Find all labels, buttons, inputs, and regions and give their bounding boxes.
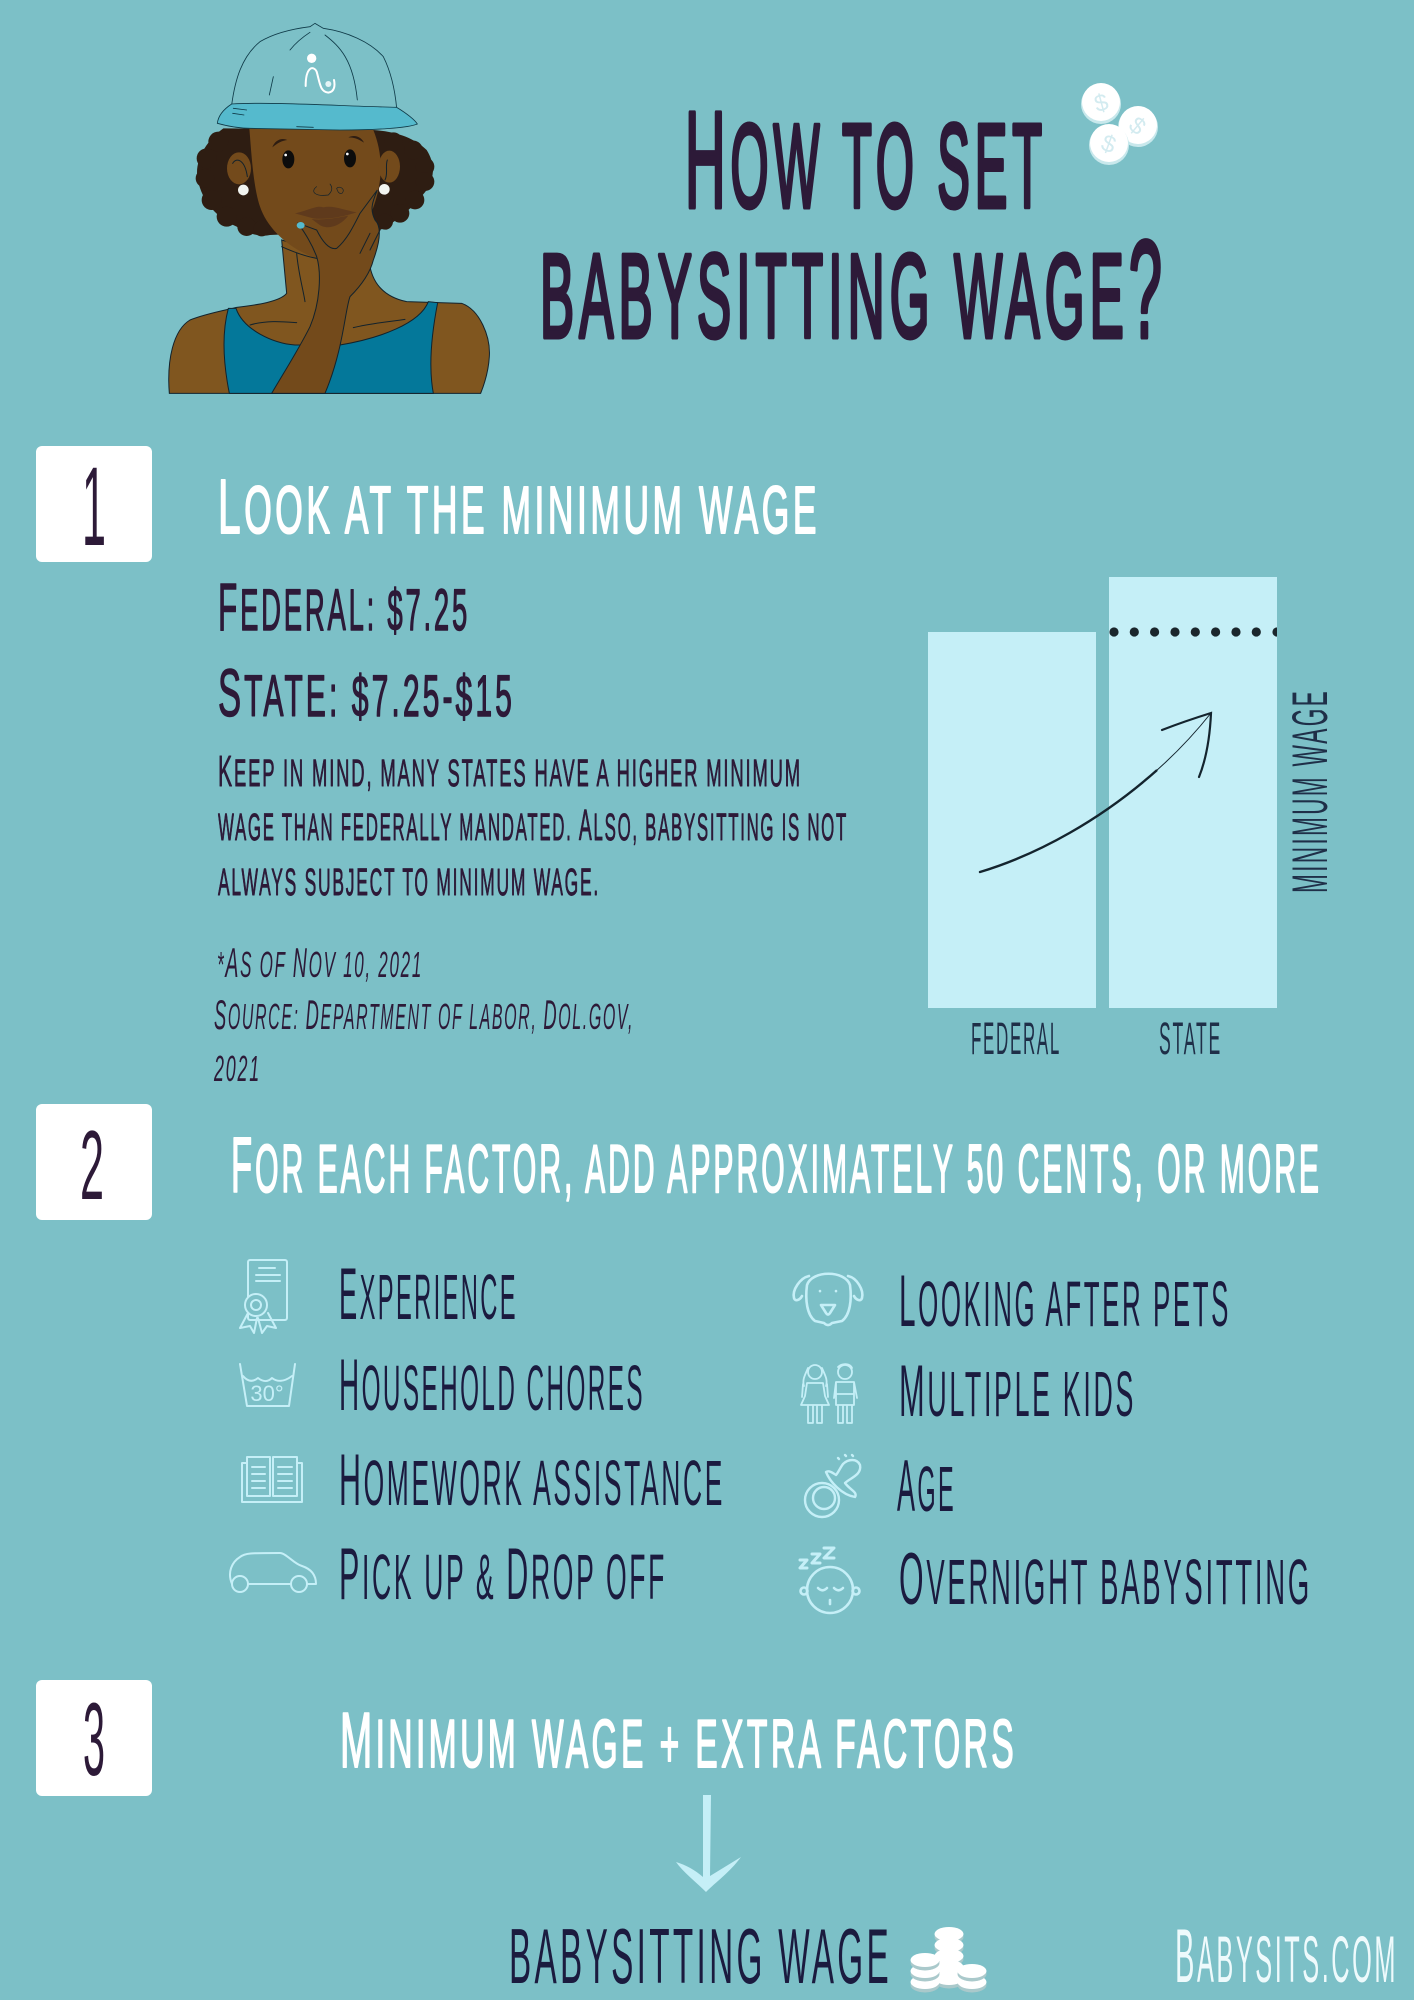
explanatory paragraph: ALWAYS SUBJECT TO MINIMUM WAGE.: [218, 862, 600, 904]
section 1: FEDERAL: $7.25: [218, 571, 470, 645]
arrow: rising wage: [980, 713, 1211, 872]
number badge 3: 3: [83, 1682, 105, 1798]
state wage: STATE: $7.25-$15: [218, 657, 515, 731]
section 3: BABYSITTING WAGE: [509, 1912, 892, 2000]
explanatory paragraph: KEEP IN MIND, MANY STATES HAVE A HIGHER MINIMUM: [218, 747, 802, 796]
explanatory paragraph: WAGE THAN FEDERALLY MANDATED. ALSO, BABYSITTING IS NOT: [218, 801, 848, 850]
factor: household chores: [240, 1343, 645, 1426]
factor: pick up and drop off: [230, 1532, 667, 1615]
factor: experience: [240, 1252, 518, 1335]
source note: *AS OF NOV 10, 2021: [217, 940, 423, 986]
icon: open book: [242, 1457, 302, 1502]
earrings: [238, 184, 390, 195]
bar chart: federal vs state minimum wage: [928, 577, 1338, 1064]
face: [249, 128, 381, 258]
bar chart: federal vs state minimum wage: STATE: [1159, 1013, 1222, 1064]
section 2: AGE: [897, 1444, 956, 1527]
section 2: MULTIPLE KIDS: [899, 1349, 1136, 1432]
cap seams: [233, 32, 357, 127]
number badge 2: 2: [80, 1110, 104, 1220]
icon: three dollar coins: [1081, 83, 1158, 165]
bar chart: federal vs state minimum wage: FEDERAL: [971, 1013, 1061, 1064]
federal bar: [928, 632, 1096, 1008]
icon: sleeping baby: [800, 1548, 860, 1613]
factor: multiple kids: [801, 1349, 1136, 1432]
icon: three dollar coins: $: [1091, 89, 1111, 118]
icon: wash basin: [240, 1364, 295, 1406]
number badge 1: 1: [82, 444, 106, 569]
section 3: [36, 1680, 1398, 2000]
number badge 1: [36, 444, 152, 569]
heading: look at the minimum wage: LOOK AT THE MINIMUM WAGE: [218, 464, 820, 550]
icon: dog face: [794, 1274, 862, 1325]
illustration: woman in a cap: [169, 23, 489, 393]
icon: pacifier: [805, 1455, 860, 1517]
icon: certificate: [240, 1260, 287, 1333]
cap logo: [306, 54, 334, 93]
icon: three dollar coins: $: [1098, 129, 1119, 159]
section 2: HOUSEHOLD CHORES: [339, 1343, 645, 1426]
icon: wash basin: 30°: [250, 1381, 284, 1406]
icon: three dollar coins: $: [1123, 112, 1151, 141]
number badge 2: [36, 1104, 152, 1220]
hand and arm: [272, 190, 379, 393]
factor: age: [805, 1444, 956, 1527]
icon: car: [230, 1553, 316, 1592]
shoulders and chest: [169, 240, 489, 393]
bar chart: federal vs state minimum wage: MINIMUM WAGE: [1282, 689, 1338, 893]
factor: overnight babysitting: [800, 1537, 1312, 1620]
source note: [214, 940, 634, 1089]
ears: [227, 151, 400, 184]
neck and finger lines: [250, 230, 405, 328]
icon: two children: [801, 1364, 857, 1423]
section 2: [36, 1104, 1322, 1620]
hair: [196, 128, 434, 236]
factor: pick up and drop off: PICK UP & DROP OFF: [339, 1532, 667, 1615]
section 1: [36, 444, 1338, 1089]
section 2: EXPERIENCE: [339, 1252, 518, 1335]
state bar: [1109, 577, 1277, 1008]
source note: SOURCE: DEPARTMENT OF LABOR, DOL.GOV,: [214, 992, 634, 1038]
arrow: down: [676, 1795, 741, 1892]
source note: 2021: [214, 1048, 261, 1089]
factor: homework assistance: [242, 1438, 725, 1521]
number badge 3: [36, 1680, 152, 1798]
factor: looking after pets: [794, 1259, 1231, 1342]
title: [540, 84, 1167, 367]
icon: coin stacks: [910, 1927, 986, 1992]
facial details: [272, 136, 364, 229]
dotted federal level line: [1109, 627, 1277, 637]
explanatory paragraph: [218, 747, 848, 904]
tank top: [224, 302, 438, 393]
cap brim: [217, 103, 417, 130]
cap crown: [232, 23, 397, 108]
section 2: HOMEWORK ASSISTANCE: [339, 1438, 725, 1521]
